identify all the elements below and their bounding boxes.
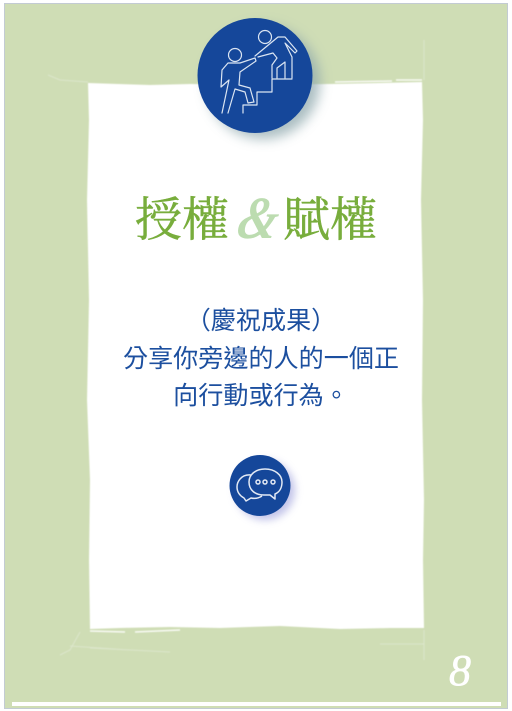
body text	[123, 307, 399, 410]
body text: 向行動或行為。	[173, 382, 349, 410]
icon: chat bubbles	[230, 455, 295, 520]
white rough-edged paper panel	[48, 40, 424, 660]
title: &	[232, 186, 286, 252]
title	[135, 183, 377, 252]
bottom white bar	[12, 702, 501, 706]
page number: 8	[449, 646, 471, 695]
icon: people climbing stairs helping hand	[198, 18, 320, 139]
title: 授權	[135, 183, 229, 250]
body text: （慶祝成果）	[186, 307, 336, 335]
body text: 分享你旁邊的人的一個正	[123, 345, 399, 373]
title: 賦權	[283, 183, 377, 250]
